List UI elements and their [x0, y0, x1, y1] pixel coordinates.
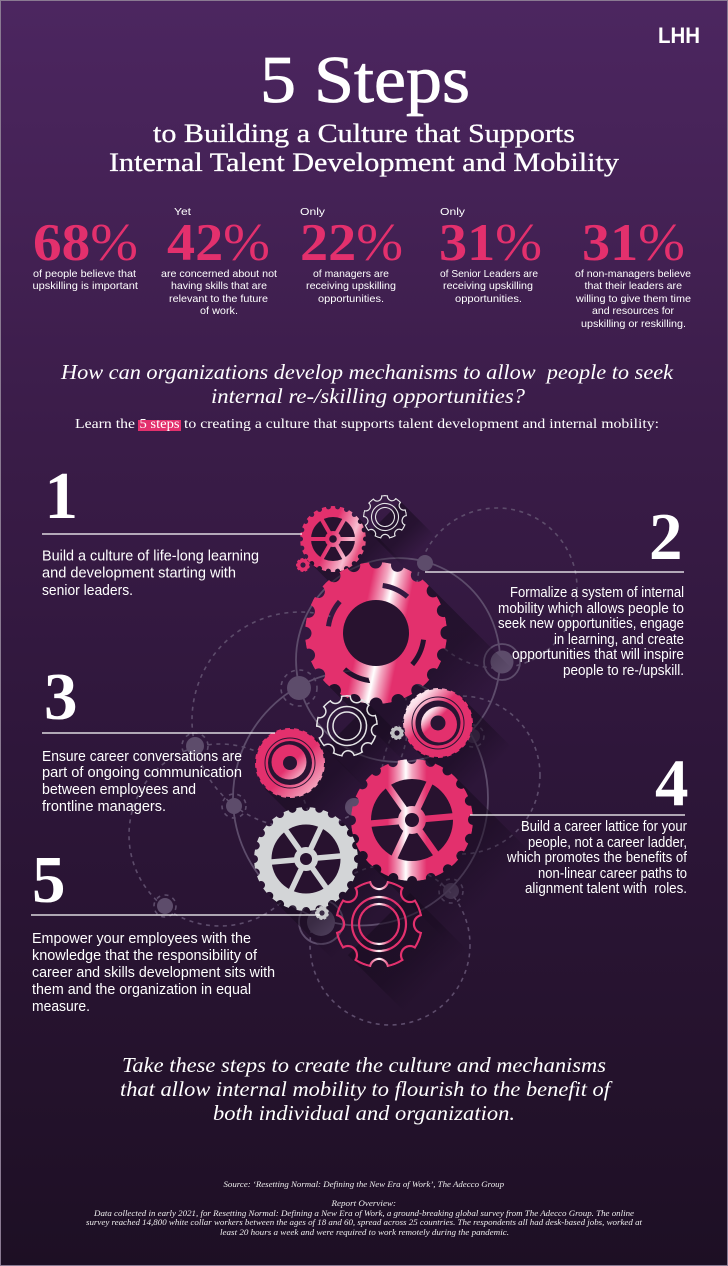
stat: 31% non-managers: and resources for: [592, 305, 674, 317]
stat: 31% senior leaders: 31%: [439, 214, 542, 272]
step 5: measure.: [32, 999, 90, 1015]
stat: 68%: 68%: [33, 214, 138, 272]
title: Internal Talent Development and Mobility: [109, 148, 619, 177]
step 5: them and the organization in equal: [32, 982, 251, 998]
step 2: Formalize a system of internal: [510, 585, 684, 601]
stat: 22%: 22%: [300, 214, 403, 272]
step 2: [425, 500, 684, 679]
stat: 42%: are concerned about not: [161, 268, 277, 280]
step 4: 4: [655, 746, 688, 820]
intro line with highlight: Learn the: [75, 417, 135, 432]
stat: 42%: [161, 206, 277, 317]
gear: white outline middle: [316, 695, 378, 757]
step 1: 1: [44, 459, 78, 533]
stat: 31% senior leaders: [439, 206, 542, 305]
step 3: part of ongoing communication: [42, 765, 242, 781]
logo: LHH: LHH: [658, 23, 700, 48]
stat: 42%: 42%: [167, 214, 270, 272]
step 3: frontline managers.: [42, 799, 166, 815]
stat: 31% non-managers: of non-managers believe: [575, 268, 691, 280]
stat: 31% senior leaders: Only: [440, 206, 466, 218]
closing statement: [120, 1053, 613, 1125]
title: to Building a Culture that Supports: [153, 119, 575, 148]
source and report overview: Report Overview:: [330, 1199, 396, 1208]
step 5: knowledge that the responsibility of: [32, 948, 258, 964]
stat: 31% senior leaders: receiving upskilling: [443, 280, 533, 292]
gear: big pink centre: [305, 562, 447, 704]
gear: tiny grey centre: [390, 726, 404, 740]
stat: 22%: receiving upskilling: [306, 280, 396, 292]
step 1: Build a culture of life-long learning: [42, 548, 259, 564]
gear: tiny pink: [296, 558, 310, 572]
stat: 68%: upskilling is important: [32, 280, 138, 292]
step 4: people, not a career ladder,: [528, 835, 687, 851]
question heading: internal re-/skilling opportunities?: [211, 384, 526, 408]
step 2: in learning, and create: [554, 632, 684, 648]
step 3: [42, 660, 275, 815]
step 4: non-linear career paths to: [538, 866, 687, 882]
gear: pink spoked small: [300, 506, 366, 572]
stat: 42%: having skills that are: [171, 280, 267, 292]
question heading: How can organizations develop mechanisms to allow people to seek: [60, 360, 674, 384]
step 1: [42, 459, 302, 599]
closing statement: that allow internal mobility to flourish to the benefit of: [120, 1077, 613, 1101]
stat: 31% senior leaders: of Senior Leaders are: [440, 268, 538, 280]
stat: 22%: [300, 206, 403, 305]
stat: 42%: relevant to the future: [169, 293, 268, 305]
step 3: between employees and: [42, 782, 196, 798]
stat: 31% non-managers: upskilling or reskilling.: [581, 318, 686, 330]
stat: 42%: of work.: [200, 305, 238, 317]
gear: tiny grey bottom: [315, 906, 329, 920]
intro line with highlight: 5 steps: [140, 417, 180, 432]
title: 5 Steps: [260, 43, 470, 117]
stat: 68%: of people believe that: [33, 268, 136, 280]
step 3: Ensure career conversations are: [42, 749, 242, 765]
gear: pink outline bottom: [335, 880, 423, 968]
step 1: and development starting with: [42, 566, 236, 582]
stat: 31% non-managers: willing to give them time: [575, 293, 691, 305]
step 4: [470, 746, 688, 897]
title: [109, 43, 619, 177]
gear: white outline top: [363, 495, 407, 538]
stat: 22%: opportunities.: [318, 293, 384, 305]
step 2: mobility which allows people to: [498, 601, 684, 617]
step 2: seek new opportunities, engage: [498, 616, 684, 632]
step 5: 5: [32, 843, 66, 917]
stat: 31% senior leaders: opportunities.: [455, 293, 522, 305]
step 4: alignment talent with roles.: [525, 881, 687, 897]
stat: 22%: Only: [300, 206, 326, 218]
step 2: opportunities that will inspire: [512, 647, 684, 663]
source and report overview: [86, 1180, 643, 1237]
intro line with highlight: to creating a culture that supports talent development and internal mobility:: [184, 417, 659, 432]
stat: 31% non-managers: [575, 214, 691, 330]
source and report overview: Source: ‘Resetting Normal: Defining the New Era of Work’, The Adecco Group: [224, 1180, 504, 1189]
closing statement: both individual and organization.: [213, 1101, 515, 1125]
step 5: Empower your employees with the: [32, 931, 251, 947]
connector network behind the gears: [129, 508, 577, 1025]
closing statement: Take these steps to create the culture and mechanisms: [122, 1053, 606, 1077]
source and report overview: Data collected in early 2021, for Resetting Normal: Defining a New Era of Work, a ground-breaking global survey from The Adecco Group. The online: [93, 1209, 635, 1218]
question heading: [60, 360, 674, 408]
stat: 42%: Yet: [174, 206, 191, 218]
stat: 31% non-managers: 31%: [582, 214, 685, 272]
step 5: [31, 843, 320, 1015]
gear: pink target right: [403, 688, 473, 758]
step 4: Build a career lattice for your: [521, 819, 687, 835]
gear: big pink spoked: [351, 759, 473, 881]
step 2: people to re-/upskill.: [563, 663, 684, 679]
gear shadows: [265, 501, 532, 1012]
gear: grey spoked: [254, 807, 358, 911]
gear: pink target left: [254, 728, 326, 798]
step 2: 2: [649, 500, 682, 574]
step 1: senior leaders.: [42, 583, 133, 599]
step 3: 3: [44, 660, 78, 734]
step 5: career and skills development sits with: [32, 965, 275, 981]
step 4: which promotes the benefits of: [506, 850, 688, 866]
source and report overview: least 20 hours a week and were required to work remotely during the pandemic.: [220, 1228, 509, 1237]
stat: 22%: of managers are: [313, 268, 389, 280]
stat: 31% non-managers: that their leaders are: [584, 280, 682, 292]
source and report overview: survey reached 14,800 white collar workers between the ages of 18 and 60, spread across 25 countries. The respondents all had desk-based jobs, worked at: [86, 1218, 643, 1227]
